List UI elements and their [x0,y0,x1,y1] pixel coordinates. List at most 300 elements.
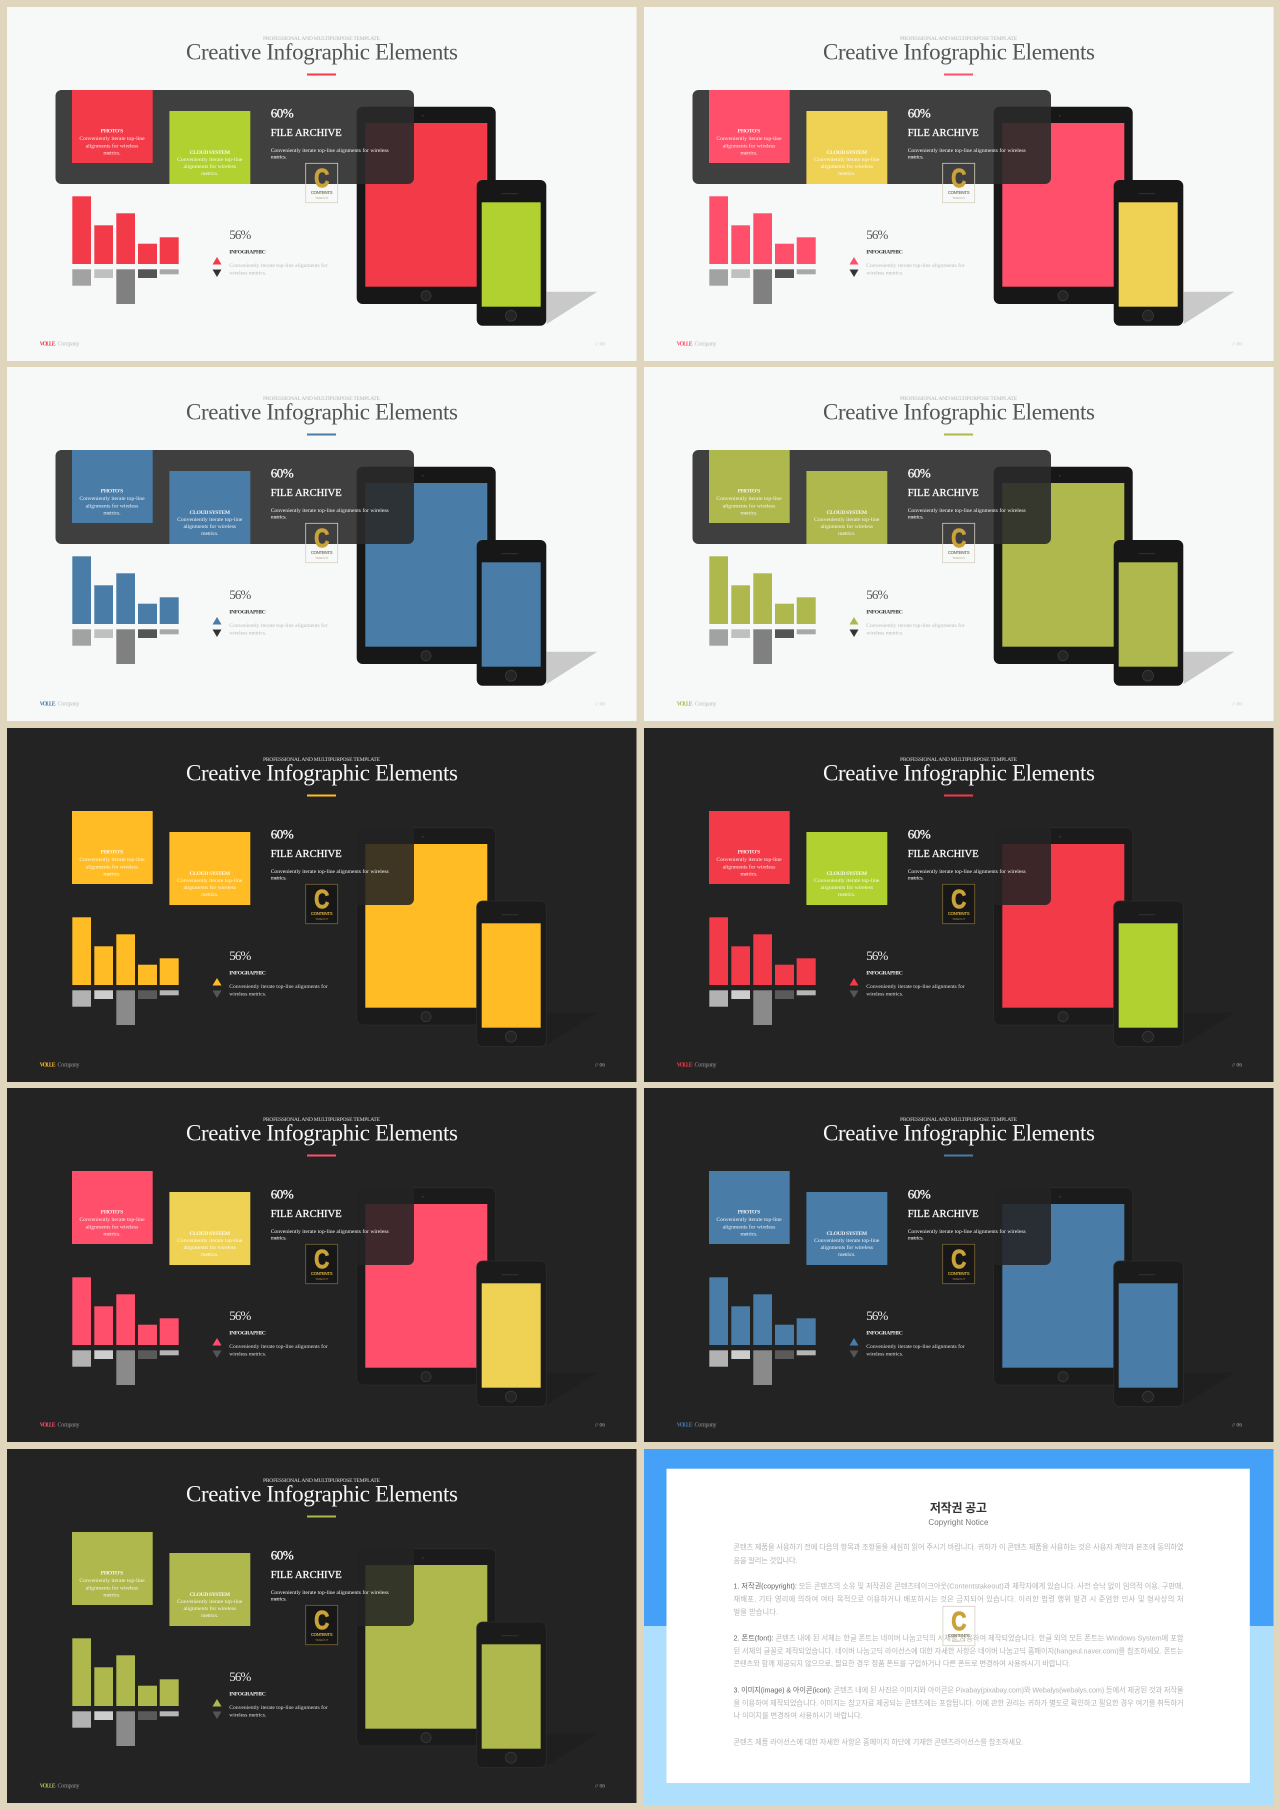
notice subheading: Copyright Notice [928,1518,989,1527]
stat: infographic [850,227,965,277]
stat: infographic [212,587,328,637]
logo badge [306,523,338,563]
footer [677,702,1242,708]
phone shadow [547,1734,597,1766]
eyebrow text: PROFESSIONAL AND MULTIPURPOSE TEMPLATE [263,396,381,402]
card: cloud system: alignments for wireless [183,1244,237,1251]
card: photos [709,1171,790,1244]
translucent dark band [56,90,414,184]
card: cloud system: Conveniently iterate top-line [177,878,243,884]
card: photos: metrics. [103,872,121,878]
translucent dark band [692,1171,1051,1265]
card: cloud system: CLOUD SYSTEM [189,510,231,516]
stat: infographic: Conveniently iterate top-line alignments for [229,1704,328,1711]
logo badge: TAKEOUT [315,196,328,200]
stat: infographic: INFOGRAPHIC [229,609,266,615]
logo badge: C [951,1606,967,1636]
card: photos: alignments for wireless [86,1584,139,1591]
eyebrow text: PROFESSIONAL AND MULTIPURPOSE TEMPLATE [263,1117,381,1123]
card: cloud system: metrics. [201,892,219,898]
card: cloud system: alignments for wireless [183,523,237,530]
eyebrow text: PROFESSIONAL AND MULTIPURPOSE TEMPLATE [900,396,1018,402]
card: photos: metrics. [103,150,121,156]
closing line: 콘텐츠 제품 라이선스에 대한 자세한 사항은 홈페이지 하단에 기재한 콘텐츠라이선스를 참조하세요. [734,1738,1024,1746]
card: cloud system: alignments for wireless [820,884,874,891]
stat: file archive [908,106,1026,161]
stat: file archive: metrics. [271,1236,287,1242]
title rule [307,434,336,436]
stat: infographic: 56% [866,948,888,963]
white notice panel [666,1469,1250,1783]
stat: infographic: INFOGRAPHIC [866,249,903,255]
bar chart: upper bars [72,1277,179,1345]
stat: infographic: wireless metrics. [866,1352,904,1358]
stat: infographic: wireless metrics. [866,271,904,277]
card: cloud system: Conveniently iterate top-line [814,878,880,884]
stat: infographic: Conveniently iterate top-line alignments for [229,262,328,269]
slide background [7,1449,636,1803]
stat: file archive: Conveniently iterate top-line alignments for wireless [271,147,389,154]
slide background [7,7,636,361]
footer: // 06 [595,1063,605,1069]
card: cloud system: alignments for wireless [820,1244,874,1251]
card: cloud system: metrics. [838,1252,856,1258]
section 1: copyright: 벌을 받습니다. [734,1608,778,1616]
card: photos: alignments for wireless [723,502,776,509]
stat: infographic [850,587,965,637]
card: cloud system: alignments for wireless [183,884,237,891]
card: photos: alignments for wireless [86,502,139,509]
logo badge: C [314,1605,329,1635]
stat: infographic: 56% [229,587,251,602]
logo badge: CONTENTS [948,1633,970,1638]
footer: // 06 [595,342,605,348]
stat: file archive: Conveniently iterate top-line alignments for wireless [271,1589,389,1596]
stat: file archive [908,1186,1026,1242]
card: cloud system: metrics. [838,171,856,177]
card: photos: metrics. [103,510,121,516]
card: photos: PHOTO'S [738,128,760,134]
stat: infographic: wireless metrics. [866,992,904,998]
stat: file archive: 60% [271,466,294,480]
section 3: image and icon: 나 이미지를 변경하여 사용하시기 바랍니다. [734,1711,862,1720]
footer [677,342,1242,348]
phone shadow [547,1013,597,1045]
stat: infographic: Conveniently iterate top-line alignments for [866,622,965,629]
phone mockup [477,901,546,1047]
stat: infographic [850,1308,965,1358]
footer: Company [58,342,80,348]
card: photos [72,1532,153,1605]
section 2: font: 콘텐츠와 함께 제공되지 않으므로, 필요한 경우 정품 폰트를 구입하거나 다른 폰트로 변경하여 사용하시기 바랍니다. [734,1659,1070,1668]
card: cloud system [169,832,250,905]
bar chart: lower gray bars [72,629,179,664]
footer: VOLLE [40,1784,56,1790]
logo badge: CONTENTS [948,911,970,916]
logo badge: TAKEOUT [952,556,965,560]
slide background [7,367,636,721]
tablet mockup [994,467,1133,664]
card: photos: alignments for wireless [723,1223,776,1230]
stat: file archive: Conveniently iterate top-line alignments for wireless [271,507,389,514]
slide 10: copyright notice [644,1449,1274,1805]
card: cloud system: Conveniently iterate top-line [814,1238,880,1244]
stat: infographic [212,1669,328,1719]
stat: file archive: Conveniently iterate top-line alignments for wireless [908,1228,1026,1235]
logo badge: CONTENTS [311,911,333,916]
footer: Company [58,1784,80,1790]
slide 5: dark, amber [7,728,636,1082]
card: cloud system: CLOUD SYSTEM [826,871,868,877]
card: cloud system [169,1192,250,1265]
slide 2: light, pink and yellow [644,7,1274,361]
card: cloud system: metrics. [201,171,219,177]
logo badge: CONTENTS [948,550,970,555]
card: cloud system [806,111,887,184]
card: cloud system: Conveniently iterate top-line [814,157,880,163]
stat: file archive: 60% [908,106,931,120]
card: photos: Conveniently iterate top-line [79,136,145,142]
stat: infographic: Conveniently iterate top-line alignments for [229,983,328,990]
stat: infographic: 56% [229,227,251,242]
card: cloud system [169,111,250,184]
bar chart: lower gray bars [709,269,816,304]
stat: file archive [271,826,389,882]
card: cloud system: CLOUD SYSTEM [189,1592,231,1598]
logo badge [306,1605,338,1645]
card: cloud system: CLOUD SYSTEM [189,1231,231,1237]
eyebrow text: PROFESSIONAL AND MULTIPURPOSE TEMPLATE [263,1478,381,1484]
card: cloud system: alignments for wireless [820,163,874,170]
card: cloud system: metrics. [201,1252,219,1258]
logo badge: TAKEOUT [952,196,965,200]
stat: infographic: Conveniently iterate top-line alignments for [229,1343,328,1350]
logo badge [943,1606,975,1646]
slide 9: dark, olive [7,1449,636,1803]
card: cloud system: metrics. [838,892,856,898]
card: cloud system: metrics. [201,531,219,537]
card: photos: Conveniently iterate top-line [716,496,782,502]
stat: infographic: INFOGRAPHIC [229,1330,266,1336]
eyebrow text: PROFESSIONAL AND MULTIPURPOSE TEMPLATE [263,36,381,42]
phone mockup [1114,901,1183,1047]
card: cloud system: alignments for wireless [183,163,237,170]
card: photos [72,1171,153,1244]
translucent dark band [56,1532,414,1626]
tablet mockup [357,1188,496,1385]
intro paragraph [734,1542,1184,1565]
stat: infographic: INFOGRAPHIC [866,609,903,615]
footer: Company [58,1063,80,1069]
stat: file archive: FILE ARCHIVE [271,128,342,139]
footer: VOLLE [677,342,693,348]
title: Creative Infographic Elements [823,760,1095,785]
footer [40,1423,605,1429]
card: cloud system: metrics. [201,1613,219,1619]
eyebrow text: PROFESSIONAL AND MULTIPURPOSE TEMPLATE [263,757,381,763]
stat: file archive: Conveniently iterate top-line alignments for wireless [271,1228,389,1235]
footer [677,1063,1242,1069]
slide background [7,728,636,1082]
card: cloud system [806,832,887,905]
translucent dark band [56,811,414,905]
bar chart: upper bars [72,556,179,624]
stat: infographic: INFOGRAPHIC [229,249,266,255]
logo badge: TAKEOUT [952,1639,966,1643]
footer: // 06 [1232,702,1242,708]
section 3: image and icon [734,1686,1184,1720]
logo badge [306,163,338,203]
stat: file archive: 60% [908,826,931,842]
stat: infographic: wireless metrics. [229,1713,267,1719]
card: cloud system: CLOUD SYSTEM [826,1231,868,1237]
title rule [307,1154,336,1156]
logo badge: CONTENTS [311,1271,333,1276]
logo badge: CONTENTS [311,190,333,195]
title: Creative Infographic Elements [823,39,1095,64]
footer: Company [58,1423,80,1429]
title: Creative Infographic Elements [186,39,458,64]
card: photos [72,811,153,884]
footer [40,1063,605,1069]
card: photos [72,450,153,523]
card: photos: Conveniently iterate top-line [79,857,145,863]
footer: Company [694,1423,716,1429]
card: photos [709,450,790,523]
card: cloud system: Conveniently iterate top-line [177,517,243,523]
logo badge [306,1244,338,1284]
translucent dark band [692,90,1051,184]
card: photos [709,90,790,163]
card: photos: alignments for wireless [723,863,776,870]
stat: infographic: 56% [866,1308,888,1323]
footer: VOLLE [40,342,56,348]
stat: infographic: Conveniently iterate top-line alignments for [866,983,965,990]
eyebrow text: PROFESSIONAL AND MULTIPURPOSE TEMPLATE [900,757,1018,763]
bar chart: upper bars [709,556,816,624]
logo badge: CONTENTS [311,550,333,555]
stat: file archive: FILE ARCHIVE [908,488,979,499]
bar chart: upper bars [709,196,816,264]
slide background [644,367,1274,721]
footer: // 06 [1232,1063,1242,1069]
stat: infographic: wireless metrics. [229,1352,267,1358]
logo badge: C [314,884,329,914]
section 2: font [734,1634,1184,1668]
footer: VOLLE [677,702,693,708]
stat: infographic: 56% [229,1669,251,1684]
translucent dark band [692,811,1051,905]
translucent dark band [692,450,1051,544]
stat: infographic: wireless metrics. [229,631,267,637]
tablet mockup [357,107,496,304]
tablet mockup [357,467,496,664]
stat: file archive: metrics. [271,1597,287,1603]
stat: file archive [271,1548,389,1603]
phone mockup [477,180,546,326]
logo badge [943,163,975,203]
stat: file archive: FILE ARCHIVE [271,1209,342,1220]
stat: file archive [271,1186,389,1242]
intro paragraph: 음을 알리는 것입니다. [734,1556,798,1565]
card: photos: alignments for wireless [86,1223,139,1230]
stat: infographic: 56% [229,948,251,963]
blue background, upper [644,1449,1274,1626]
section 2: font: 된 서체의 글꼴로 제작되었습니다. 네이버 나눔고딕 라이선스에 대한 자세한 사항은 네이버 나눔고딕 홈페이지(hangeul.naver.com)를 참조하세요. 폰트는 [734,1646,1184,1656]
intro paragraph: 콘텐츠 제품을 사용하기 전에 다음의 항목과 조항들을 세심히 읽어 주시기 바랍니다. 귀하가 이 콘텐츠 제품을 사용하는 것은 사용자 계약과 본조에 동의하였 [734,1542,1184,1552]
slide 7: dark, pink and yellow [7,1088,636,1442]
stat: file archive: Conveniently iterate top-line alignments for wireless [908,868,1026,875]
bar chart: lower gray bars [709,629,816,664]
logo badge: C [314,163,329,193]
phone shadow [547,1373,597,1405]
footer: Company [58,702,80,708]
stat: file archive: FILE ARCHIVE [271,1570,342,1581]
card: photos: metrics. [103,1592,121,1598]
stat: file archive: 60% [271,106,294,120]
stat: file archive: FILE ARCHIVE [271,488,342,499]
card: cloud system [169,471,250,544]
footer [40,1784,605,1790]
card: photos: Conveniently iterate top-line [716,136,782,142]
stat: file archive [908,466,1026,521]
card: photos: Conveniently iterate top-line [79,1578,145,1584]
stat: infographic [212,227,328,277]
phone mockup [1114,1261,1183,1407]
stat: infographic: 56% [229,1308,251,1323]
bar chart: lower gray bars [709,1350,816,1385]
card: photos: PHOTO'S [101,1570,123,1576]
card: photos: PHOTO'S [101,850,123,856]
phone mockup [477,1622,546,1768]
eyebrow text: PROFESSIONAL AND MULTIPURPOSE TEMPLATE [900,36,1018,42]
phone shadow [547,292,597,324]
stat: file archive: metrics. [908,155,924,161]
stat: file archive: Conveniently iterate top-line alignments for wireless [271,868,389,875]
stat: file archive: 60% [908,466,931,480]
card: photos: metrics. [740,150,758,156]
tablet mockup [357,828,496,1025]
title: Creative Infographic Elements [823,399,1095,424]
footer: Company [694,1063,716,1069]
card: photos: Conveniently iterate top-line [716,1217,782,1223]
stat: infographic [212,1308,328,1358]
phone mockup [1114,540,1183,686]
logo badge: C [951,884,966,914]
footer: VOLLE [40,1063,56,1069]
stat: file archive: metrics. [271,155,287,161]
stat: infographic: 56% [866,587,888,602]
bar chart: lower gray bars [72,269,179,304]
title: Creative Infographic Elements [186,760,458,785]
stat: infographic: 56% [866,227,888,242]
title rule [307,74,336,76]
stat: file archive: FILE ARCHIVE [908,849,979,860]
logo badge [306,884,338,924]
stat: file archive: metrics. [271,515,287,521]
logo badge: TAKEOUT [952,917,965,921]
logo badge: TAKEOUT [315,556,328,560]
tablet mockup [994,828,1133,1025]
tablet mockup [994,1188,1133,1385]
card: photos: Conveniently iterate top-line [716,857,782,863]
bar chart: lower gray bars [72,1711,179,1746]
logo badge: C [314,1244,329,1274]
stat: file archive: FILE ARCHIVE [271,849,342,860]
footer: // 06 [1232,342,1242,348]
phone shadow [1184,1013,1234,1045]
card: photos: PHOTO'S [101,488,123,494]
tablet mockup [357,1549,496,1746]
footer [40,342,605,348]
tablet mockup [994,107,1133,304]
card: photos: alignments for wireless [723,142,776,149]
stat: infographic: Conveniently iterate top-line alignments for [866,1343,965,1350]
title: Creative Infographic Elements [186,1120,458,1145]
footer: // 06 [1232,1423,1242,1429]
footer: Company [694,342,716,348]
stat: infographic: Conveniently iterate top-line alignments for [229,622,328,629]
bar chart: lower gray bars [709,990,816,1025]
footer: Company [694,702,716,708]
stat: infographic [850,948,965,998]
stat: file archive: metrics. [908,1236,924,1242]
stat: file archive: Conveniently iterate top-line alignments for wireless [908,147,1026,154]
card: photos [709,811,790,884]
footer [40,702,605,708]
card: photos: PHOTO'S [738,1210,760,1216]
card: cloud system: CLOUD SYSTEM [826,150,868,156]
stat: infographic: Conveniently iterate top-line alignments for [866,262,965,269]
slide background [644,7,1274,361]
eyebrow text: PROFESSIONAL AND MULTIPURPOSE TEMPLATE [900,1117,1018,1123]
card: cloud system [169,1553,250,1626]
stat: file archive [908,826,1026,882]
stat: file archive: Conveniently iterate top-line alignments for wireless [908,507,1026,514]
light blue background, lower [644,1626,1274,1805]
logo badge [943,884,975,924]
card: photos: Conveniently iterate top-line [79,496,145,502]
footer: VOLLE [40,702,56,708]
card: cloud system: metrics. [838,531,856,537]
bar chart: lower gray bars [72,990,179,1025]
footer: VOLLE [677,1063,693,1069]
card: photos: Conveniently iterate top-line [79,1217,145,1223]
stat: file archive [271,106,389,161]
stat: file archive: 60% [271,1548,294,1562]
card: cloud system: alignments for wireless [183,1605,237,1612]
slide background [644,1088,1274,1442]
card: cloud system [806,1192,887,1265]
stat: file archive: metrics. [908,515,924,521]
card: photos [72,90,153,163]
stat: file archive: metrics. [271,876,287,882]
title: Creative Infographic Elements [823,1120,1095,1145]
slide 4: light, olive [644,367,1274,721]
title: Creative Infographic Elements [186,399,458,424]
footer: // 06 [595,702,605,708]
footer: // 06 [595,1423,605,1429]
title rule [944,74,973,76]
bar chart: upper bars [709,917,816,985]
title rule [307,1516,336,1518]
slide 6: dark, red and green [644,728,1274,1082]
bar chart: upper bars [72,1638,179,1706]
section 1: copyright [734,1581,1184,1616]
section 1: copyright: 재배포, 기타 영리에 의하여 여타 목적으로 이용하거나 배포하시는 것은 금지되어 있습니다. 이러한 법령 행위 발견 시 준엄한 민사 및 형사상의 처 [734,1594,1184,1604]
stat: file archive: 60% [271,1186,294,1202]
logo badge: TAKEOUT [315,1638,328,1642]
